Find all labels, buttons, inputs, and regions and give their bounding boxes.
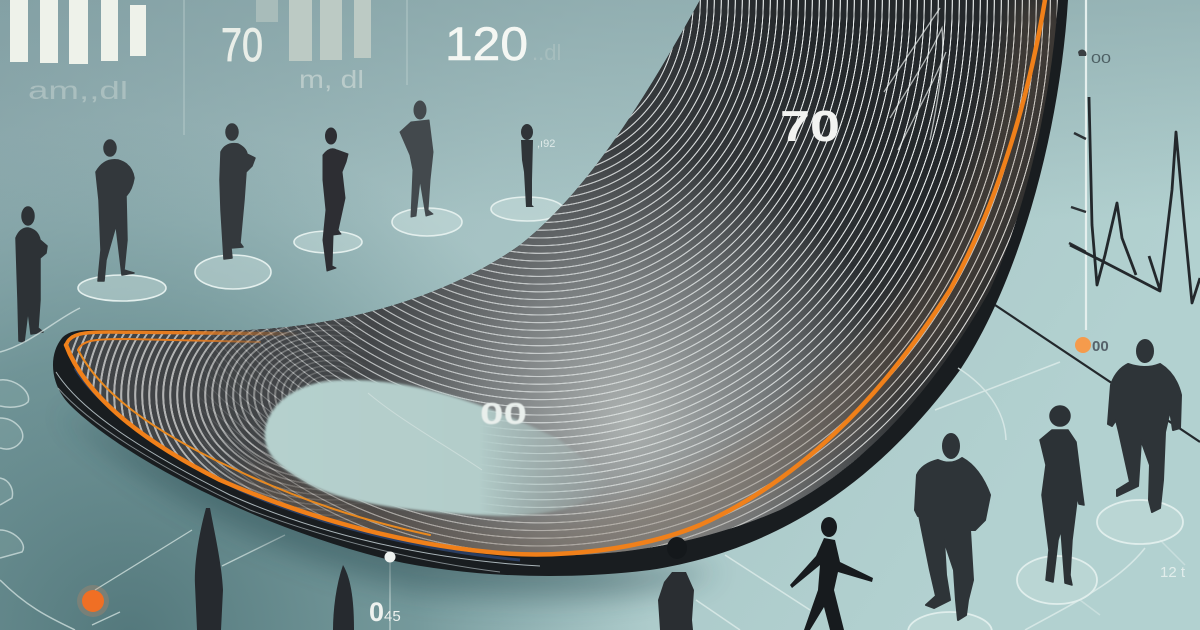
right chart: orange marker — [1075, 337, 1109, 355]
left edge floating rings — [0, 308, 80, 630]
person 2 — [96, 140, 134, 281]
top bar chart: white bars — [10, 0, 146, 64]
top bar chart: faded bars — [256, 0, 371, 61]
large curve: bright strands upper right — [884, 8, 946, 150]
unit: mg/dl middle: m, dl — [299, 66, 364, 94]
curve label: 70: 70 — [780, 102, 840, 151]
platforms — [78, 197, 563, 301]
person: large, centre — [915, 434, 990, 620]
right chart: pulse line — [1070, 97, 1200, 303]
large curve: orange highlight — [66, 0, 1045, 554]
person 3 — [220, 124, 255, 259]
soft shadow below curve — [60, 410, 720, 598]
people on platforms: upper row — [16, 101, 563, 342]
diagonal line — [995, 305, 1200, 442]
large curve: blue undertone stripe — [75, 368, 520, 560]
person 1 — [16, 207, 47, 342]
inner clearing guide line — [368, 393, 482, 470]
large curve: fine line mesh — [50, 0, 1070, 580]
bottom-right platforms — [908, 500, 1183, 630]
curve label: 80: 00 — [480, 396, 527, 431]
right chart: axis label: 00 — [1091, 51, 1111, 66]
large curve: band detail lines — [56, 372, 540, 572]
bottom-left connector lines — [92, 530, 285, 625]
axis and data point: bottom left — [77, 560, 390, 630]
person: walking — [790, 517, 873, 630]
label: 70: 70 — [221, 18, 263, 71]
chart dividers — [184, 0, 407, 135]
large curve: dark outer band — [53, 0, 1068, 576]
person: partial at bottom centre — [658, 537, 694, 630]
unit: faded beside 120: ..dl — [532, 40, 561, 65]
unit: mg/dl left: am,,dl — [28, 77, 128, 105]
large curve: inner clearing — [265, 380, 610, 516]
person: large, right — [1108, 340, 1181, 512]
bottom label: 0: 045 — [369, 597, 401, 627]
axis marker: white dot — [384, 552, 396, 562]
person 4 — [323, 128, 348, 271]
label: 120: 120 — [445, 17, 528, 70]
person: woman — [1040, 406, 1084, 585]
right chart: orange marker: 00 — [1092, 338, 1109, 355]
small label near person 6: ,ı92 — [537, 138, 555, 150]
person 6 — [521, 124, 534, 207]
bottom-right connector lines — [696, 362, 1185, 630]
dark posts below the curve — [195, 508, 354, 630]
bottom-right label: 12 t — [1160, 564, 1186, 581]
right chart: axis — [1069, 0, 1086, 330]
person 5 — [400, 101, 433, 217]
